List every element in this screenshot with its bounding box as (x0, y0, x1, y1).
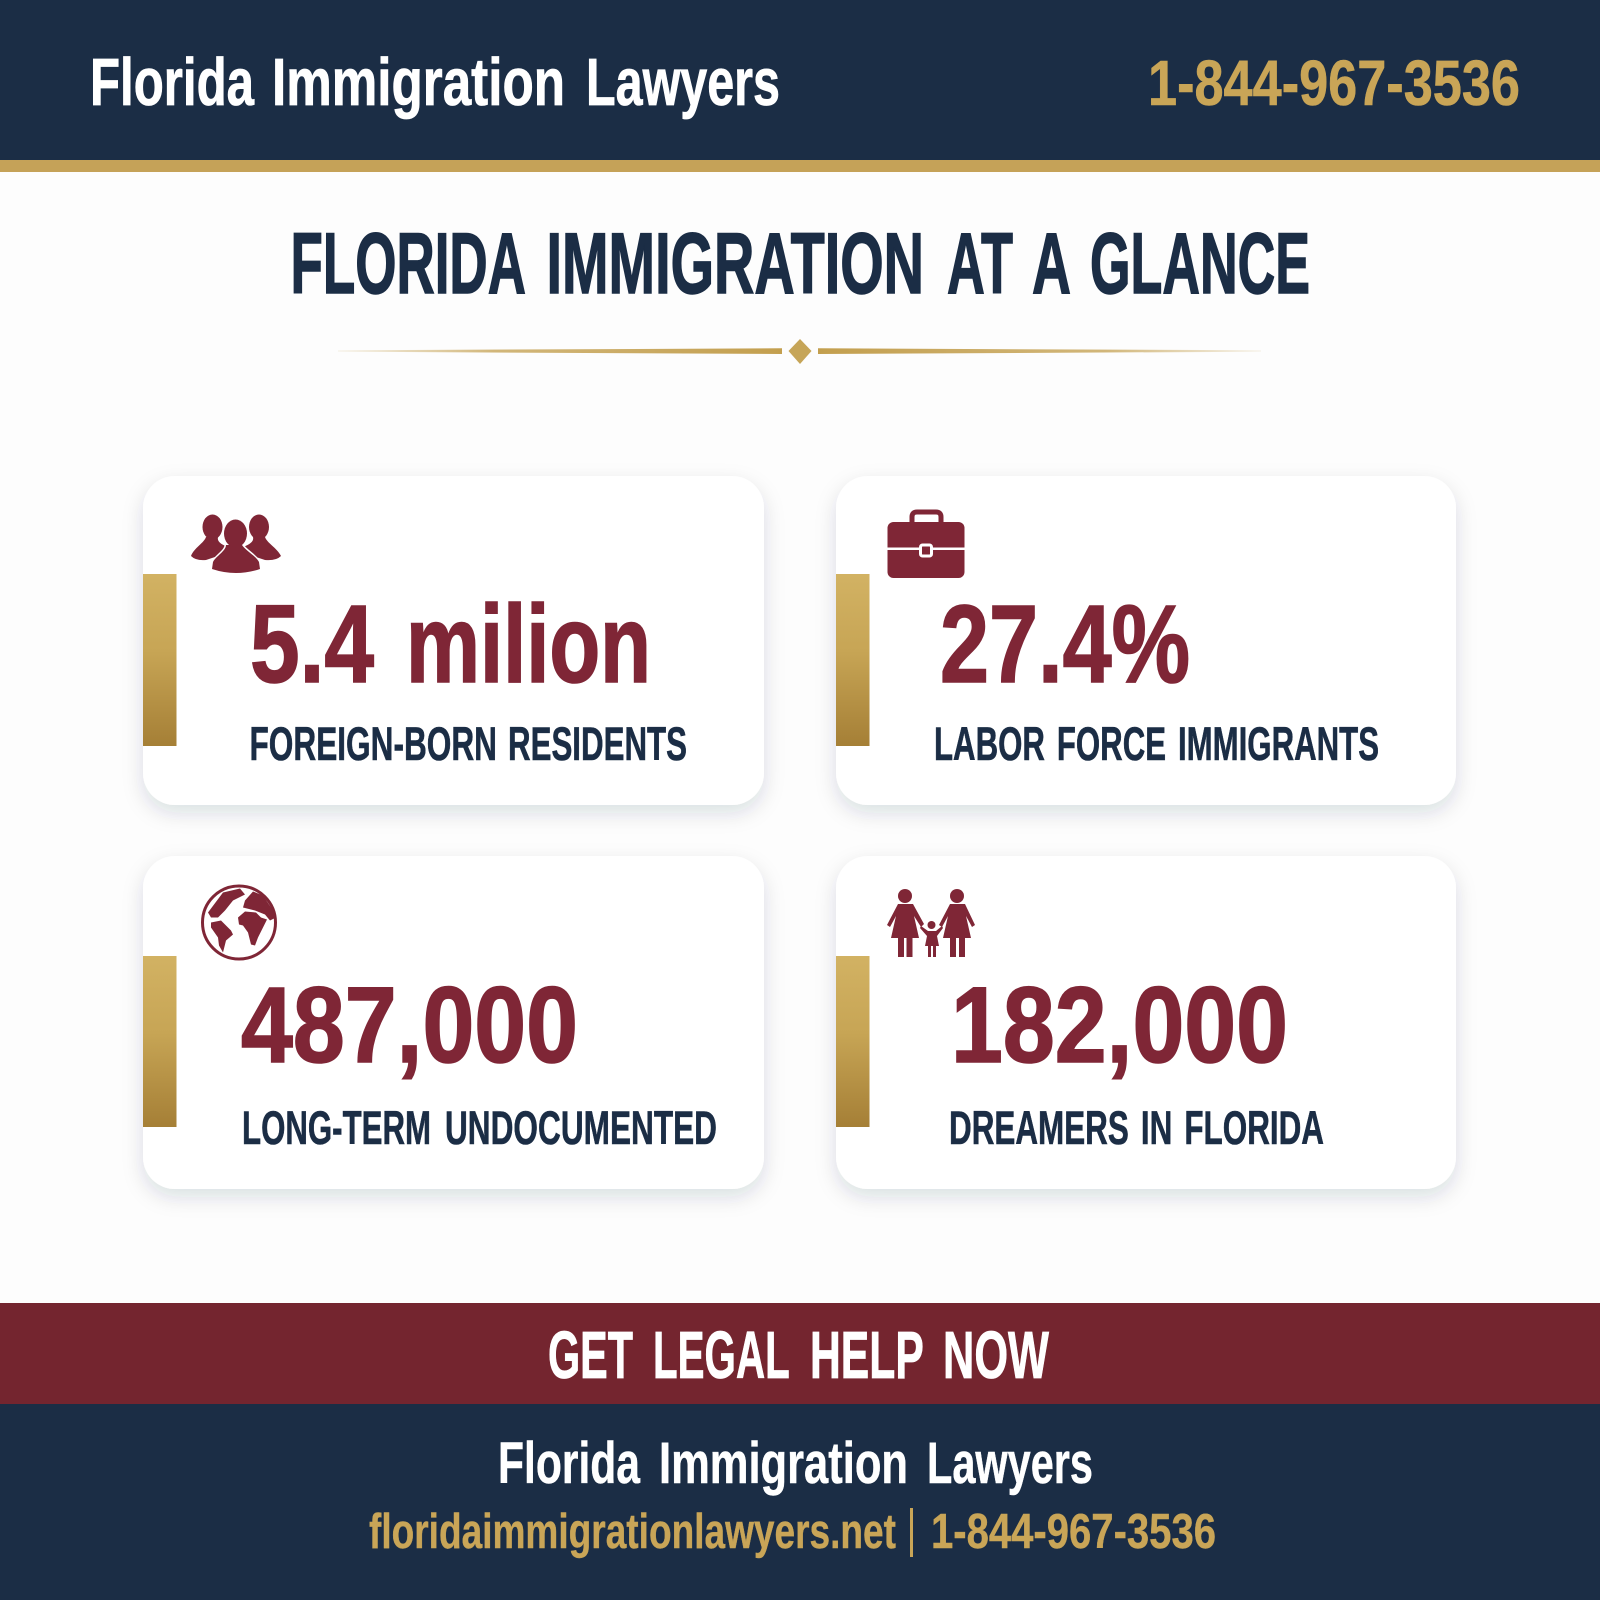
header band (0, 0, 1600, 172)
main title: FLORIDA (290, 216, 525, 312)
main title: AT (947, 216, 1013, 312)
header phone number: 1-844-967-3536 (1148, 47, 1520, 119)
footer website: floridaimmigrationlawyers.net (369, 1505, 896, 1559)
stat label: LONG-TERM (242, 1101, 431, 1154)
panel: long-term undocumented (143, 856, 764, 1189)
stat label: UNDOCUMENTED (445, 1101, 717, 1154)
icon: family (887, 889, 975, 957)
gold accent bar (836, 574, 870, 746)
header firm name: Immigration (272, 45, 565, 120)
header firm name: Lawyers (586, 45, 780, 120)
footer firm name: Lawyers (927, 1431, 1093, 1496)
stat value: 5.4 (250, 583, 374, 706)
footer firm name: Florida (498, 1431, 641, 1496)
panel: foreign-born residents (143, 476, 764, 805)
call-to-action text: LEGAL (653, 1318, 789, 1393)
footer separator (910, 1508, 913, 1557)
main title: GLANCE (1090, 216, 1310, 312)
panel: labor force immigrants (836, 476, 1456, 805)
stat value: milion (406, 583, 651, 706)
main title: A (1032, 216, 1070, 312)
stat value: 27.4% (940, 583, 1190, 706)
title divider with diamond (338, 339, 1261, 364)
header firm name: Florida (90, 45, 255, 120)
stat value: 487,000 (241, 964, 578, 1085)
gold accent bar (836, 956, 870, 1127)
footer firm name: Immigration (659, 1431, 908, 1496)
stat label: DREAMERS IN FLORIDA (949, 1101, 1324, 1154)
icon: globe (202, 886, 276, 959)
icon: group of people (191, 514, 281, 573)
gold accent bar (143, 574, 176, 746)
stat label: FOREIGN-BORN (250, 717, 497, 770)
footer band (0, 1404, 1600, 1600)
stat label: LABOR FORCE IMMIGRANTS (934, 717, 1379, 770)
call-to-action band (0, 1303, 1600, 1404)
icon: briefcase (887, 512, 965, 578)
panel: dreamers in florida (836, 856, 1456, 1189)
call-to-action text: HELP (810, 1318, 923, 1393)
gold accent bar (143, 956, 176, 1127)
stat label: RESIDENTS (508, 717, 687, 770)
footer phone number: 1-844-967-3536 (931, 1505, 1216, 1559)
call-to-action text: GET (548, 1318, 633, 1393)
stat value: 182,000 (951, 964, 1288, 1085)
main title: IMMIGRATION (546, 216, 924, 312)
call-to-action text: NOW (943, 1318, 1049, 1393)
